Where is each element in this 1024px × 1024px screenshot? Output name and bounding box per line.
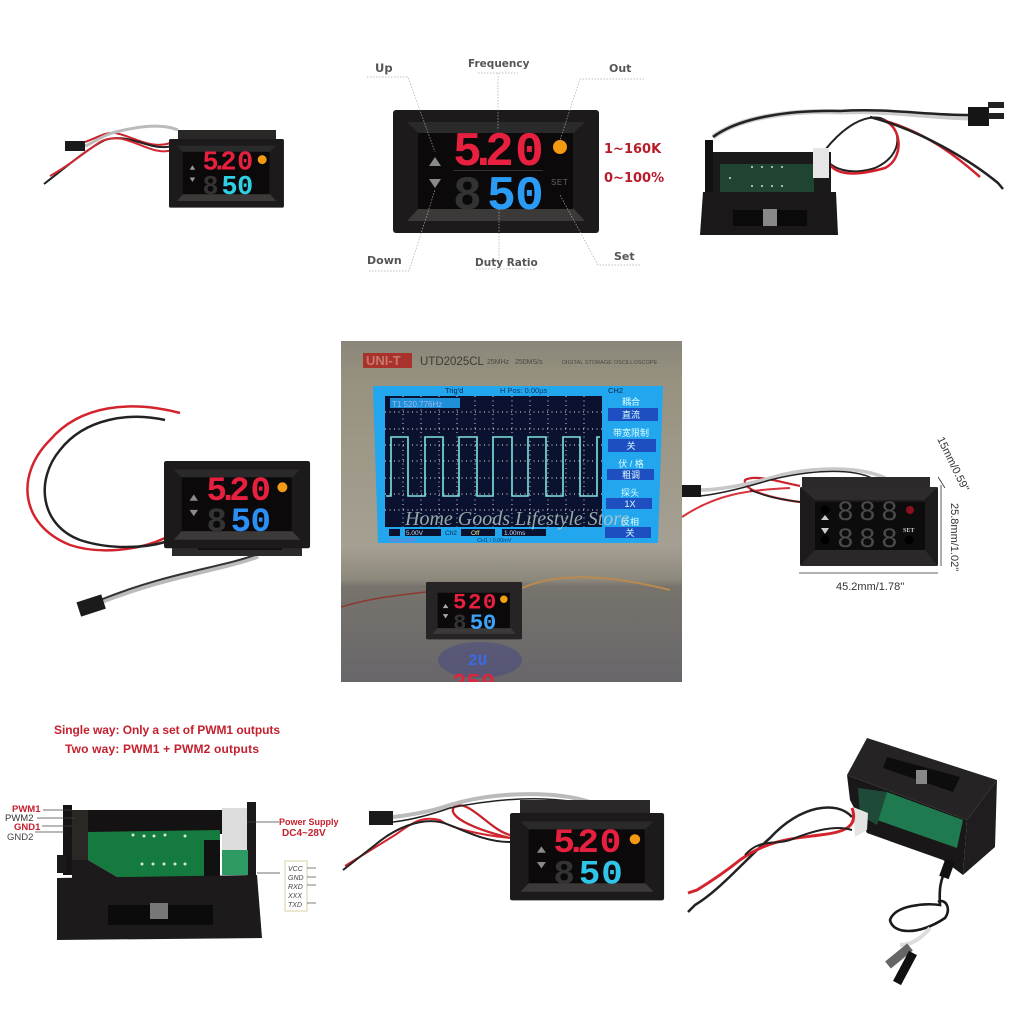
square wave (386, 437, 600, 496)
device front: 50 (231, 504, 271, 542)
panel: oscilloscope photo (341, 341, 682, 698)
panel: angled front view with long wires (27, 406, 310, 617)
label: Duty Ratio: Duty Ratio (475, 257, 538, 269)
frequency range: 1~160K (604, 142, 662, 157)
device front: 5.20 (453, 126, 544, 180)
circuit board (720, 164, 814, 192)
device front: 5.20 (202, 149, 253, 179)
reflection (438, 642, 522, 678)
scope menu: 直流 (622, 409, 640, 420)
scope screen: Menu OFF (390, 538, 417, 544)
brand badge (363, 353, 412, 368)
panel: oscilloscope photo: 250 (452, 671, 495, 698)
serial pin box: RXD (288, 884, 303, 891)
device front unlit: 888 (837, 498, 898, 529)
depth label: 15mm/0.59'' (934, 435, 971, 494)
panel: annotated front view (367, 58, 664, 271)
scope menu: 伏 / 格 (618, 458, 644, 469)
device front: 50 (470, 610, 496, 636)
device front unlit: SET (903, 528, 914, 534)
device front: SET (551, 178, 568, 187)
scope screen: Trig'd (445, 386, 463, 395)
device front: 50 (579, 855, 623, 894)
scope menu (605, 396, 658, 538)
label: Up: Up (375, 61, 393, 75)
serial pin box (285, 861, 316, 911)
device front: 8 (453, 610, 466, 636)
device front: 8 (553, 855, 575, 894)
scope menu: 1X (624, 499, 636, 509)
PWM2: PWM2 (5, 813, 34, 824)
scope menu: 带宽限制 (613, 427, 649, 438)
device front: 8 (202, 173, 219, 203)
device front unlit: 888 (837, 525, 898, 556)
panel: dimensions view (682, 435, 971, 593)
device front (169, 139, 284, 208)
height label: 25.8mm/1.02'' (948, 503, 960, 571)
PWM1: PWM1 (12, 804, 41, 815)
device front (164, 461, 310, 548)
connector (813, 148, 829, 178)
scope menu: 耦合 (622, 396, 640, 407)
scope screen: Ch2 (445, 530, 457, 537)
signal wires (890, 867, 948, 931)
device front (426, 582, 522, 639)
panel: angled back view (688, 738, 997, 983)
device front: 50 (487, 170, 544, 224)
device back (57, 802, 262, 940)
serial pin box: VCC (288, 866, 304, 873)
scope menu: 反相 (621, 516, 639, 527)
label: Out: Out (609, 62, 631, 75)
power wires (688, 807, 852, 912)
voltage label: DC4~28V (282, 828, 326, 839)
scope menu: 探头 (621, 487, 639, 498)
device front: 5.20 (553, 824, 621, 863)
serial pin box: TXD (288, 902, 302, 909)
scope screen: H Pos: 0.00µs (500, 386, 548, 395)
width label: 45.2mm/1.78'' (836, 581, 904, 593)
jumper plugs (888, 947, 910, 965)
panel: small front view with wires (44, 126, 284, 208)
wires behind device (522, 577, 670, 590)
scope screen (373, 386, 663, 544)
panel: oscilloscope photo: 25MHz 250MS/s (487, 359, 543, 366)
leader lines (367, 73, 644, 271)
heading line 2: Two way: PWM1 + PWM2 outputs (65, 742, 259, 756)
scope menu: 关 (626, 440, 636, 451)
dimension lines (799, 477, 945, 573)
panel: oscilloscope photo: 2U (468, 652, 487, 670)
scope screen: 1.00ms (504, 530, 526, 537)
GND1: GND1 (14, 822, 41, 833)
scope screen: CH1 / 0.00mV (477, 538, 512, 544)
label: Set: Set (614, 250, 635, 263)
scope menu: 关 (625, 527, 635, 538)
panel: back view with wires (700, 102, 1004, 235)
serial pin box: GND (288, 875, 304, 882)
scope screen: T1 520.776Hz (392, 400, 442, 409)
device front: 50 (221, 173, 253, 203)
scope screen: 5.00V (406, 530, 424, 537)
label: Frequency: Frequency (468, 58, 530, 70)
circuit board (877, 792, 963, 848)
device front: 8 (207, 504, 227, 542)
device front: 8 (453, 170, 482, 224)
panel: oscilloscope photo: UNI-T (366, 353, 401, 368)
scope menu: 粗调 (622, 469, 640, 480)
watermark: Home Goods Lifestyle Store (404, 508, 629, 530)
scope screen: Off (471, 530, 480, 537)
device front (510, 813, 664, 900)
device front: 520 (453, 590, 496, 616)
scope model: UTD2025CL (420, 356, 485, 368)
heading line 1: Single way: Only a set of PWM1 outputs (54, 723, 280, 737)
device front unlit (800, 487, 938, 566)
device front: 5.20 (207, 473, 271, 511)
serial pin box: XXX (287, 893, 302, 900)
panel: wiring diagram (5, 723, 339, 940)
connector (853, 807, 868, 837)
duty range: 0~100% (604, 171, 664, 186)
pin leader lines (35, 810, 280, 873)
scope screen: CH2 (608, 386, 623, 395)
device front (393, 110, 599, 233)
panel: large front view (343, 794, 664, 900)
label: Down: Down (367, 254, 402, 267)
GND2: GND2 (7, 832, 33, 843)
panel: oscilloscope photo: DIGITAL STORAGE OSCILLOSCOPE (562, 360, 658, 366)
power supply label: Power Supply (279, 817, 339, 827)
